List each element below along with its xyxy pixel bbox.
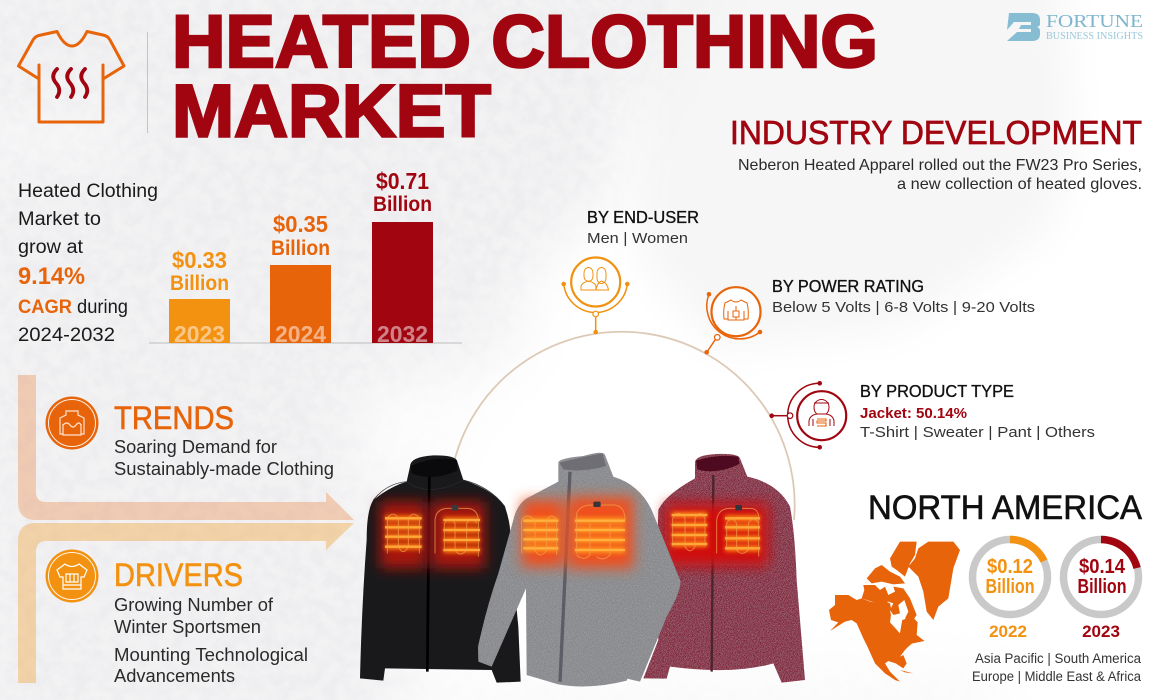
donut: 2022: Billion (986, 576, 1034, 598)
industry development: a new collection of heated gloves. (897, 176, 1142, 193)
bar 2023 (169, 247, 230, 347)
donut: 2023 (1064, 540, 1138, 641)
bar 2024: 2024 (275, 321, 326, 347)
background fabric texture (0, 0, 662, 700)
donut: 2022 (972, 539, 1048, 641)
node: by power rating: BY POWER RATING (772, 276, 924, 296)
jacket: maroon (643, 454, 805, 683)
node: by power rating (704, 276, 1035, 355)
panel: trends: Sustainably-made Clothing (114, 459, 334, 479)
panel: trends: TRENDS (114, 400, 234, 436)
title (172, 0, 878, 152)
segmentation arc (452, 332, 795, 520)
panel: drivers: Mounting Technological (114, 645, 308, 665)
donut: 2022: 2022 (989, 622, 1027, 641)
panel: drivers: Growing Number of (114, 595, 274, 615)
panel: trends (46, 396, 334, 479)
industry development: Neberon Heated Apparel rolled out the FW23 Pro Series, (738, 157, 1142, 174)
panel: drivers: DRIVERS (114, 557, 243, 593)
CAGR text block: CAGR during (18, 297, 128, 318)
CAGR text block: 2024-2032 (18, 325, 115, 346)
donut: 2023: $0.14 (1079, 556, 1126, 578)
CAGR text block: 9.14% (18, 263, 85, 290)
logo: Fortune Business Insights (1007, 11, 1143, 42)
other regions: Europe | Middle East & Africa (972, 669, 1141, 684)
panel: drivers (46, 550, 308, 686)
bar chart: market size (149, 168, 462, 347)
background brush wash, top right (640, 0, 1075, 350)
map: north america (829, 542, 960, 682)
donut: 2023: Billion (1078, 576, 1126, 598)
panel: drivers: Winter Sportsmen (114, 617, 261, 637)
jacket: gray (478, 453, 681, 686)
jackets illustration (360, 453, 805, 686)
other regions: Asia Pacific | South America (975, 651, 1141, 666)
arrow: trends (18, 375, 354, 520)
arrow: drivers (18, 523, 354, 683)
CAGR text block: Market to (18, 209, 101, 230)
CAGR text block: grow at (18, 237, 84, 258)
node: by product type: BY PRODUCT TYPE (860, 381, 1014, 401)
panel: trends: Soaring Demand for (114, 437, 277, 457)
other regions (972, 651, 1141, 684)
bar 2032: 2032 (377, 321, 428, 347)
node: by power rating: Below 5 Volts | 6-8 Volts | 9-20 Volts (772, 299, 1035, 316)
node: by product type: Jacket: 50.14% (860, 405, 967, 422)
bar 2032: $0.71 (376, 168, 429, 194)
CAGR text block (18, 181, 158, 346)
panel: drivers: Advancements (114, 666, 235, 686)
logo: Fortune Business Insights: BUSINESS INSIGHTS (1046, 31, 1143, 42)
node: by end-user: BY END-USER (587, 207, 699, 227)
icon: sweater badge (46, 396, 98, 450)
node: by end-user (561, 207, 699, 334)
donut: 2023: 2023 (1082, 622, 1120, 641)
title: MARKET (172, 70, 491, 152)
bar 2032 (372, 168, 433, 347)
node: by product type: T-Shirt | Sweater | Pant | Others (860, 424, 1095, 441)
donut: 2022: $0.12 (987, 556, 1033, 578)
title: HEATED CLOTHING (172, 0, 878, 83)
CAGR text block: Heated Clothing (18, 181, 158, 202)
node: by end-user: Men | Women (587, 230, 688, 247)
node: by product type (769, 381, 1095, 450)
industry development: INDUSTRY DEVELOPMENT (730, 114, 1142, 151)
panel: north america (829, 489, 1142, 684)
jacket: black (360, 455, 521, 683)
icon: t-shirt with heat waves (18, 32, 124, 122)
industry development (730, 114, 1142, 193)
bar 2032: Billion (373, 193, 432, 216)
bar 2024: $0.35 (273, 211, 328, 237)
bar 2024: Billion (271, 237, 330, 260)
bar 2024 (270, 211, 331, 347)
bar 2023: Billion (170, 272, 229, 295)
icon: shirt badge (46, 550, 98, 602)
bar 2023: $0.33 (172, 247, 227, 273)
bar 2023: 2023 (174, 321, 225, 347)
logo: Fortune Business Insights: FORTUNE (1046, 11, 1143, 31)
panel: north america: NORTH AMERICA (868, 489, 1142, 527)
